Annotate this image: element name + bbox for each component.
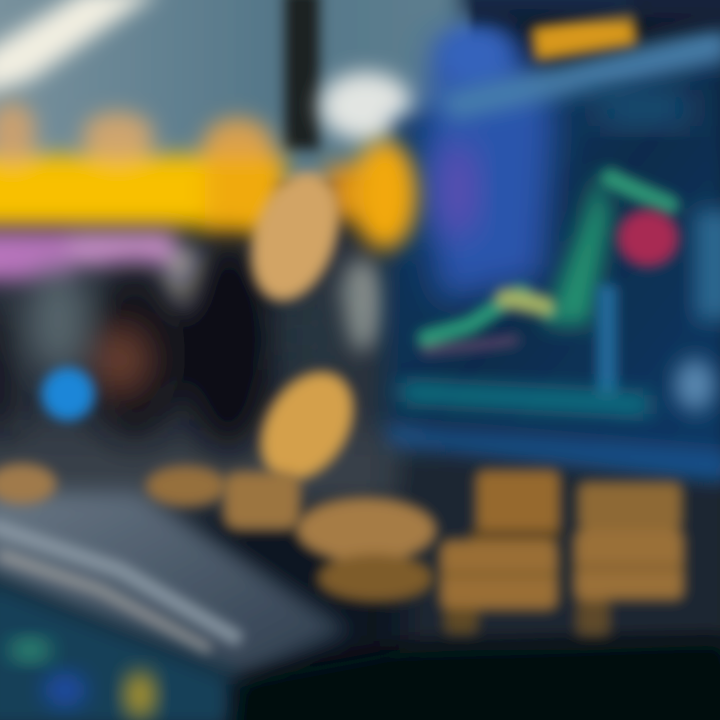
ceiling light	[0, 0, 160, 95]
coin stack centre low	[296, 498, 436, 602]
purple glow	[436, 140, 480, 240]
yellow banner	[0, 102, 375, 235]
coin pile far left	[0, 464, 56, 504]
screen right panel	[695, 210, 720, 320]
coin stack right	[574, 482, 684, 636]
dark pole	[284, 0, 320, 150]
flying coin lower	[242, 356, 372, 496]
pink banner	[0, 232, 384, 351]
chart baseline	[400, 382, 650, 415]
keyboard	[0, 490, 350, 720]
lower right highlight	[675, 359, 715, 411]
orange label	[532, 12, 636, 60]
coin pile centre	[224, 472, 300, 530]
monitor top edge	[440, 25, 720, 120]
red marker	[618, 210, 678, 266]
flying coin upper	[237, 161, 353, 311]
blue round badge	[42, 368, 94, 420]
orange glow beside monitor	[353, 141, 417, 249]
desk dark area	[230, 640, 720, 720]
dark top right	[640, 0, 720, 24]
monitor with chart	[384, 0, 720, 480]
monitor screen	[384, 40, 720, 475]
silhouettes of people	[0, 240, 338, 450]
chart vertical bar	[597, 285, 617, 395]
green chart area	[545, 170, 610, 325]
coin pile left	[146, 466, 226, 506]
white lamp	[320, 72, 412, 140]
green line chart	[425, 178, 670, 350]
blue tower	[420, 30, 555, 300]
coin stack tall	[440, 470, 560, 634]
coin stacks	[0, 464, 684, 636]
monitor bottom edge	[385, 425, 720, 480]
